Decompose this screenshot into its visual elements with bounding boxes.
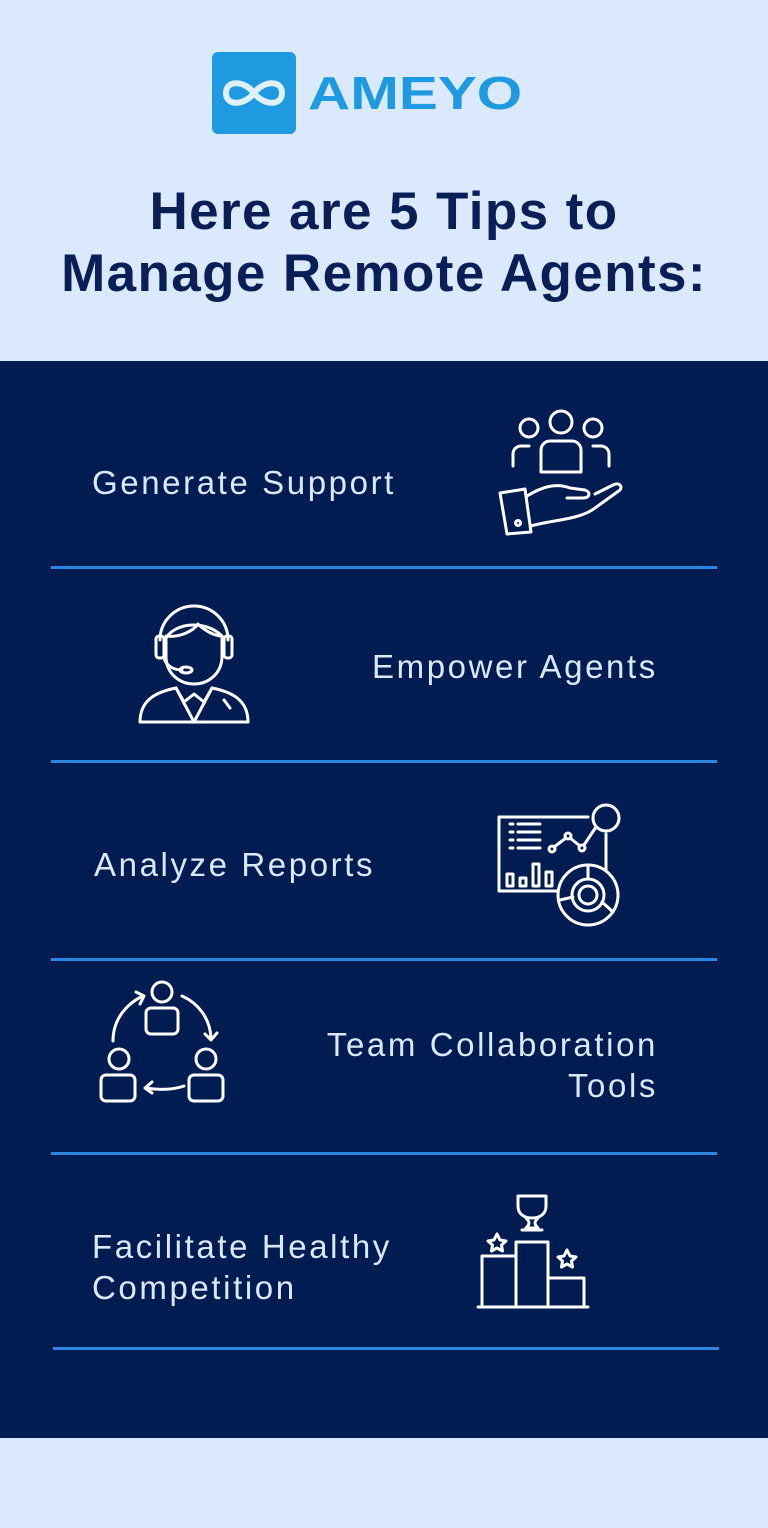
icon: agent with headset: [138, 604, 250, 724]
title: [61, 182, 707, 303]
tip 4 text: Tools: [568, 1067, 658, 1104]
tip 1 text: Generate Support: [92, 464, 396, 501]
tip 4 text: [327, 1026, 658, 1104]
logo: [212, 52, 522, 134]
icon: report dashboard: [498, 804, 620, 926]
tip 5 text: [92, 1228, 392, 1306]
icon: hand with people: [498, 410, 622, 536]
title: Here are 5 Tips to: [149, 182, 619, 241]
tip 2 text: Empower Agents: [372, 648, 658, 685]
title: Manage Remote Agents:: [61, 244, 707, 303]
icon: team collaboration cycle: [100, 980, 224, 1102]
logo text: AMEYO: [308, 67, 522, 119]
tip 5 text: Facilitate Healthy: [92, 1228, 392, 1265]
logo icon: [212, 52, 296, 134]
dark panel: [0, 361, 768, 1438]
tip 4 text: Team Collaboration: [327, 1026, 658, 1063]
tip 5 text: Competition: [92, 1269, 297, 1306]
tip 3 text: Analyze Reports: [94, 846, 375, 883]
icon: podium with trophy: [476, 1194, 590, 1308]
